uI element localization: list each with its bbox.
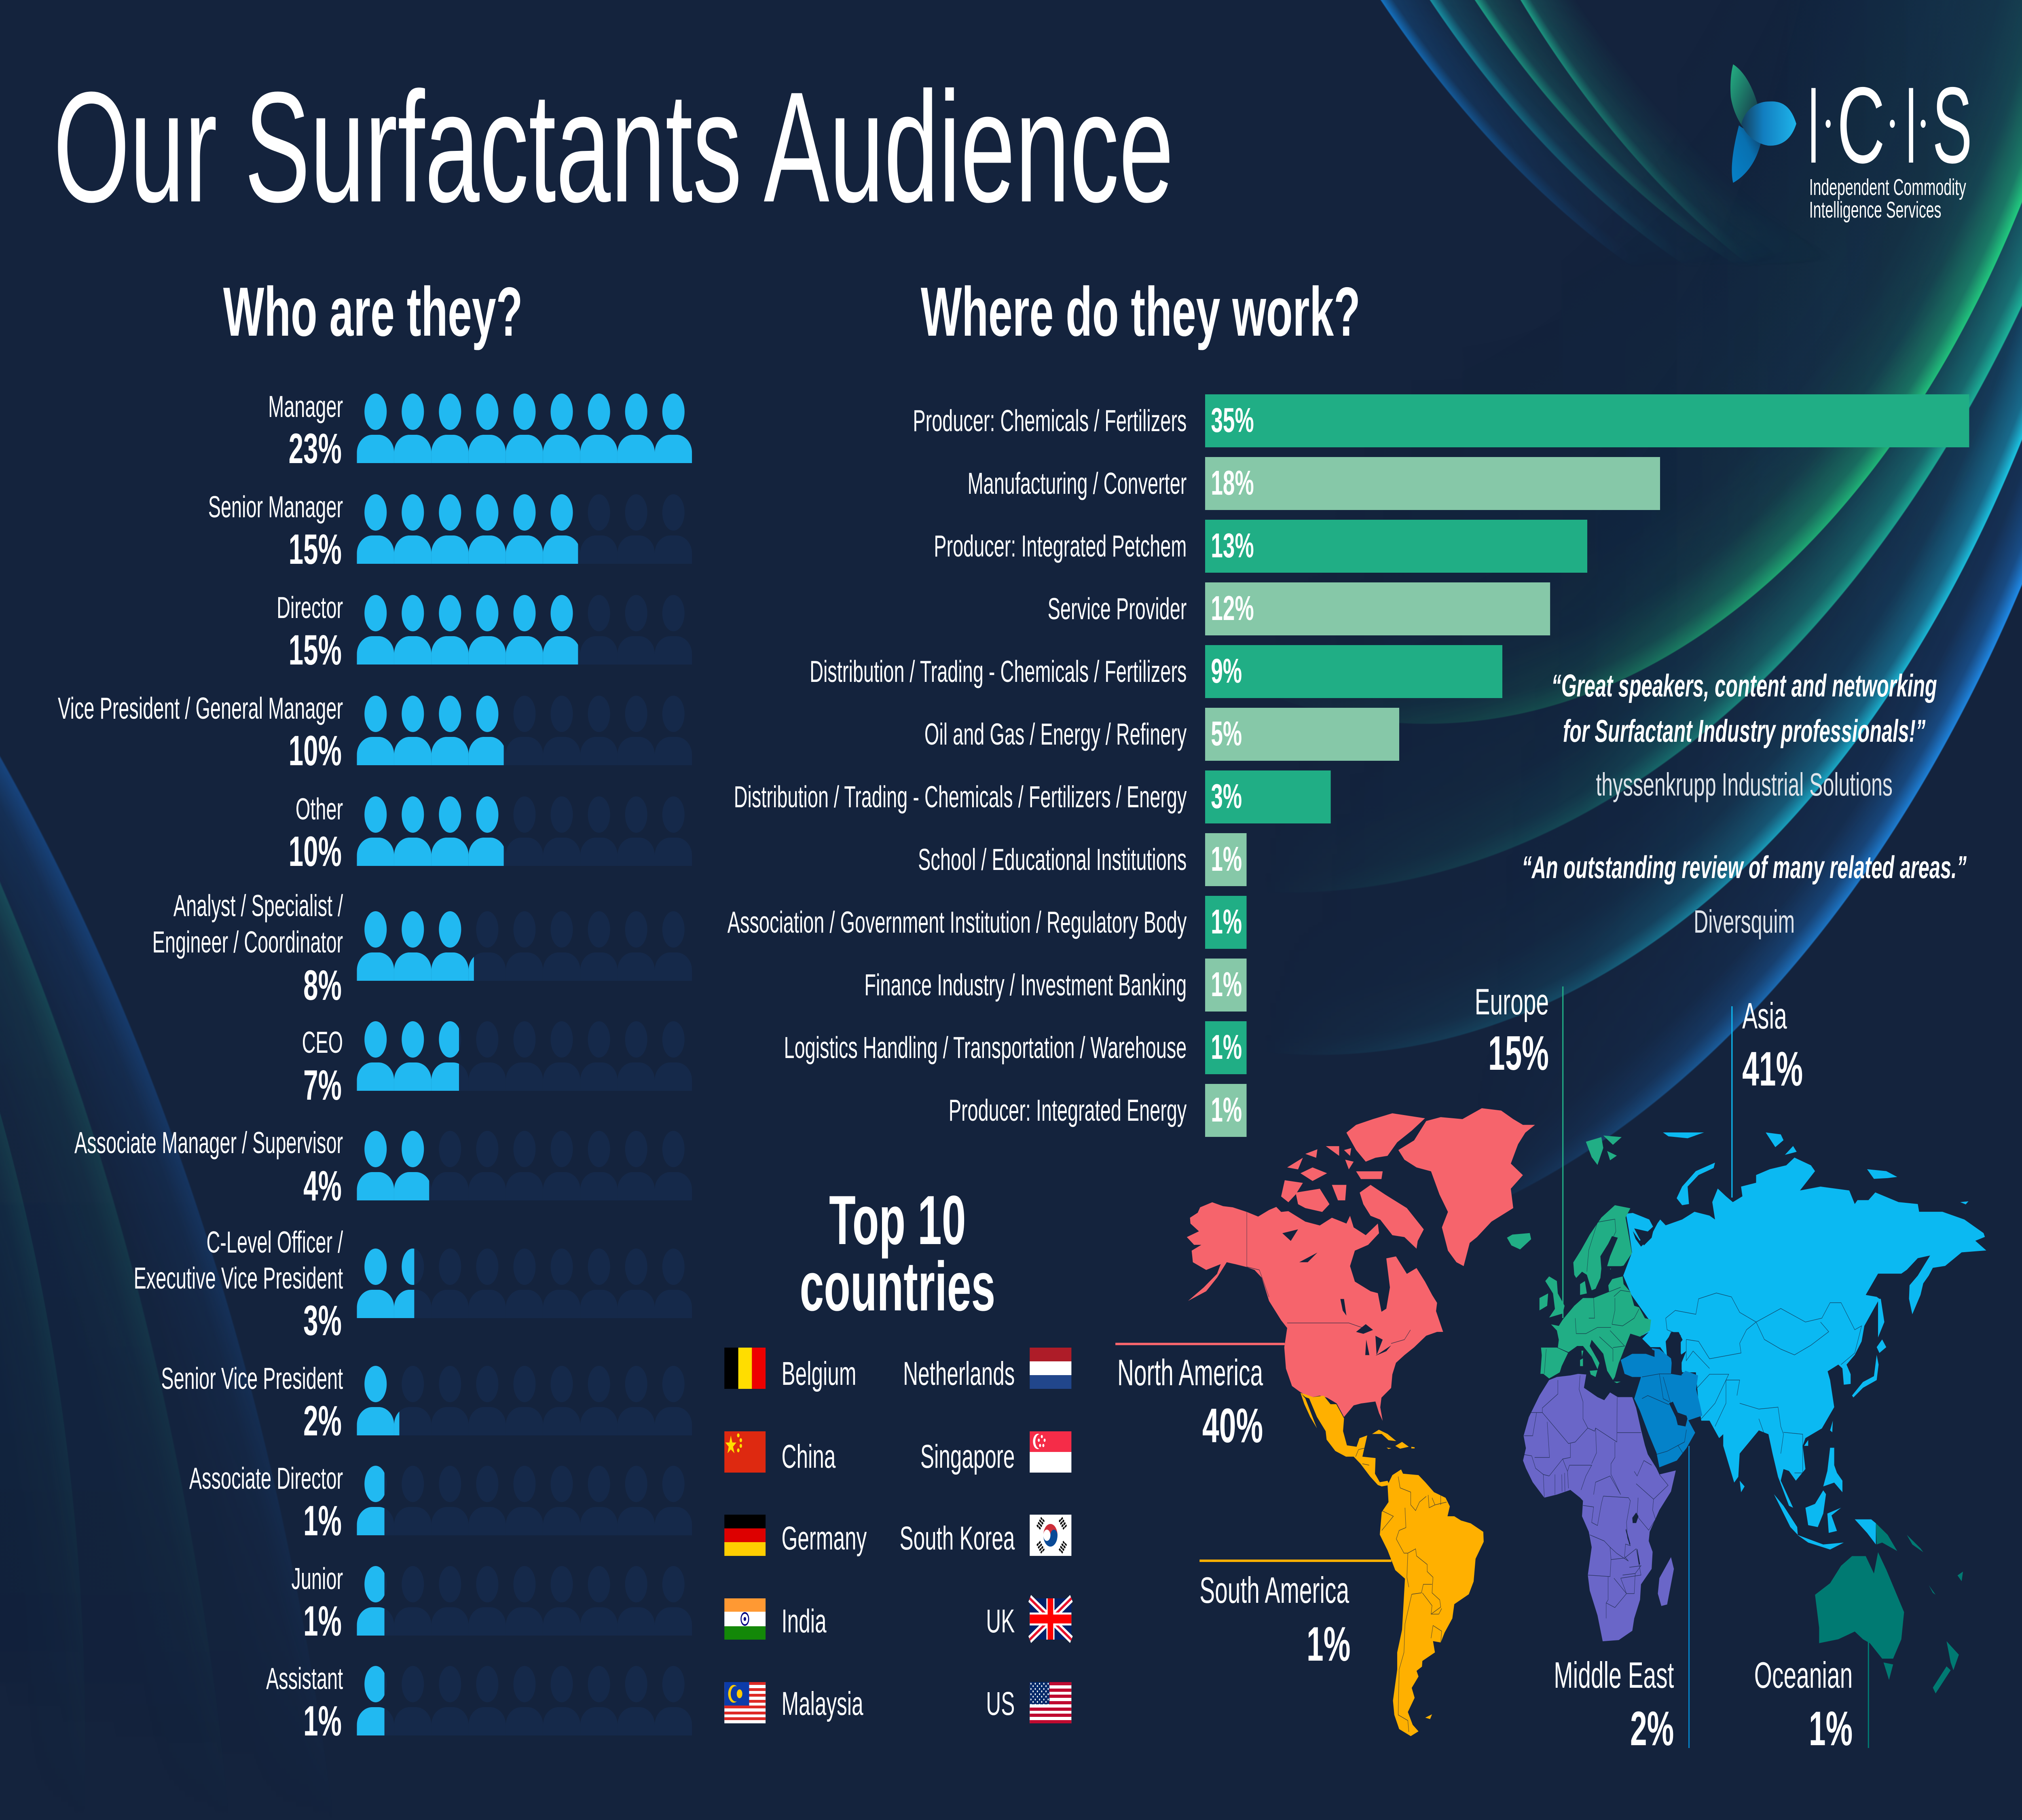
callout: Asia: Asia (1742, 995, 1787, 1037)
row: Senior Manager (208, 490, 692, 573)
bar chart: where do they work: 1% (1211, 903, 1242, 941)
bar chart: where do they work: 35% (1211, 401, 1254, 440)
bar chart: where do they work: Service Provider (1048, 592, 1187, 626)
map: North America (1187, 1108, 1535, 1421)
bar chart: where do they work: 18% (1211, 464, 1254, 502)
row: Analyst: 8% (303, 961, 342, 1009)
callout: South America (1199, 1560, 1392, 1671)
ICIS logo: Intelligence Services (1809, 197, 1941, 223)
row: Senior VP: 2% (303, 1397, 342, 1445)
row: Junior: 1% (303, 1597, 342, 1645)
row: Analyst (152, 889, 692, 1009)
quotes (1522, 668, 1967, 940)
quotes: “Great speakers, content and networking (1551, 668, 1937, 703)
ICIS logo (1730, 64, 1972, 223)
bar chart: where do they work: Distribution / Trading - Chemicals / Fertilizers / Energy (734, 780, 1187, 814)
bar chart: where do they work: Logistics Handling / Transportation / Warehouse (784, 1031, 1187, 1065)
callout: Oceanian (1754, 1634, 1869, 1756)
map: Middle East (1621, 1348, 1702, 1467)
callout: Europe (1475, 981, 1563, 1318)
top 10 countries heading (799, 1181, 995, 1325)
panel: top 10 countries list: UK (986, 1603, 1015, 1640)
panel: who are they pictogram rows (58, 390, 692, 1745)
row: Assistant: 1% (303, 1697, 342, 1745)
row: Associate Manager: 4% (303, 1162, 342, 1210)
bar chart: where do they work: 12% (1211, 589, 1254, 628)
background arcs bottom left (0, 756, 305, 1638)
callout: Asia (1731, 995, 1803, 1198)
row: Other (289, 792, 692, 875)
bar chart: where do they work: Finance Industry / Investment Banking (864, 968, 1187, 1002)
flag: Belgium (724, 1348, 766, 1389)
row: C-Level: 3% (303, 1297, 342, 1344)
row: Senior VP (161, 1362, 692, 1445)
row: Vice President: 10% (289, 727, 342, 775)
bar chart: where do they work: 1% (1211, 965, 1242, 1004)
row: Director: Director (277, 591, 343, 625)
bar chart: where do they work: 1% (1211, 1091, 1242, 1129)
callout: Middle East: 2% (1630, 1701, 1674, 1756)
ICIS logo: Independent Commodity (1809, 175, 1966, 200)
row: Senior Manager: 15% (289, 525, 342, 573)
ICIS logo: I (1905, 65, 1917, 186)
row: C-Level: Executive Vice President (134, 1261, 343, 1295)
callout: North America: 40% (1202, 1399, 1263, 1453)
ICIS logo: I (1807, 65, 1820, 186)
row: Associate Manager: Associate Manager / Supervisor (74, 1126, 343, 1160)
bar chart: where do they work: Distribution / Trading - Chemicals / Fertilizers (810, 655, 1187, 689)
row: Analyst: Engineer / Coordinator (152, 925, 343, 959)
quotes: for Surfactant Industry professionals!” (1563, 713, 1926, 749)
bar chart: where do they work: Producer: Integrated Petchem (934, 529, 1187, 563)
flag: Netherlands (1030, 1348, 1071, 1389)
quotes: thyssenkrupp Industrial Solutions (1596, 767, 1893, 803)
flag: US (1030, 1682, 1071, 1723)
bar chart: where do they work: School / Educational Institutions (918, 843, 1187, 877)
quotes: “An outstanding review of many related areas.” (1522, 849, 1967, 885)
panel: top 10 countries list: Singapore (920, 1438, 1015, 1475)
panel: top 10 countries list (724, 1348, 1071, 1723)
panel: top 10 countries list: US (986, 1685, 1015, 1722)
row: CEO: 7% (303, 1061, 342, 1109)
panel: top 10 countries list: Malaysia (781, 1685, 863, 1722)
map: Latin America (1300, 1393, 1484, 1736)
flag: Germany (724, 1515, 766, 1556)
bar chart: where do they work: Association / Government Institution / Regulatory Body (728, 906, 1187, 940)
row: C-Level: C-Level Officer / (206, 1225, 343, 1259)
row: Assistant (266, 1662, 692, 1745)
row: Associate Director: Associate Director (189, 1462, 343, 1496)
callout: Middle East: Middle East (1554, 1655, 1674, 1696)
bar chart: where do they work: Manufacturing / Converter (968, 467, 1187, 501)
callout: Oceanian: 1% (1809, 1701, 1853, 1756)
panel: top 10 countries list: Netherlands (903, 1355, 1015, 1392)
row: Associate Manager (74, 1126, 692, 1210)
bar chart: where do they work: Producer: Integrated Energy (949, 1094, 1187, 1128)
map: North America lakes (1282, 1230, 1391, 1356)
row: Analyst: Analyst / Specialist / (173, 889, 343, 923)
ICIS logo: C (1837, 65, 1885, 186)
flag: China (724, 1431, 766, 1473)
bar chart: where do they work: 5% (1211, 715, 1242, 753)
ICIS logo: S (1932, 65, 1972, 186)
row: CEO: CEO (302, 1026, 343, 1060)
callout: South America: 1% (1307, 1617, 1350, 1671)
map: Oceania (1815, 1523, 1963, 1693)
callout: Europe: Europe (1475, 981, 1549, 1022)
quotes: Diversquim (1694, 904, 1795, 940)
bar chart: where do they work: 9% (1211, 652, 1242, 690)
callout: North America (1115, 1343, 1285, 1453)
flag: UK (1030, 1598, 1071, 1640)
row: Senior Manager: Senior Manager (208, 490, 343, 524)
top 10 countries heading: Top 10 (829, 1181, 966, 1259)
bar chart: where do they work: 3% (1211, 777, 1242, 816)
flag: South Korea (1030, 1515, 1071, 1556)
map: Europe (1507, 1136, 1651, 1383)
row: Vice President: Vice President / General Manager (58, 692, 343, 726)
panel: top 10 countries list: China (781, 1438, 836, 1475)
callout: South America: South America (1199, 1570, 1349, 1611)
map: Asia (1623, 1132, 1986, 1549)
map: Africa (1523, 1374, 1676, 1641)
top 10 countries heading: countries (799, 1248, 995, 1325)
row: Vice President (58, 692, 692, 775)
row: Junior (291, 1562, 692, 1645)
panel: top 10 countries list: South Korea (900, 1520, 1015, 1557)
bar chart: where do they work: 1% (1211, 1028, 1242, 1067)
map: country borders (1247, 1212, 1861, 1732)
bar chart: where do they work: Producer: Chemicals / Fertilizers (913, 404, 1187, 438)
panel: top 10 countries list: Belgium (781, 1355, 857, 1392)
row: Associate Director: 1% (303, 1497, 342, 1545)
flag: Malaysia (724, 1682, 766, 1723)
callout: Asia: 41% (1742, 1042, 1803, 1096)
bar chart: where do they work: 1% (1211, 840, 1242, 878)
map: water overlays (1595, 1225, 1688, 1565)
panel: top 10 countries list: Germany (781, 1520, 867, 1557)
row: Manager: Manager (268, 390, 343, 424)
callout: North America: North America (1117, 1352, 1263, 1393)
row: Associate Director (189, 1462, 692, 1545)
callout: Europe: 15% (1488, 1026, 1549, 1080)
row: Other: Other (296, 792, 343, 826)
row: Assistant: Assistant (266, 1662, 343, 1696)
row: Junior: Junior (291, 1562, 343, 1596)
bar chart: where do they work (728, 394, 1969, 1137)
row: CEO (302, 1021, 692, 1109)
heading: where do they work: Where do they work? (921, 273, 1360, 351)
callout: Middle East (1554, 1446, 1690, 1756)
heading: who are they: Who are they? (223, 273, 522, 351)
bar chart: where do they work: 13% (1211, 527, 1254, 565)
row: Manager (268, 390, 692, 472)
row: C-Level (134, 1225, 692, 1344)
row: Director: 15% (289, 626, 342, 674)
background arcs top right (1325, 0, 2022, 1195)
callout: Oceanian: Oceanian (1754, 1655, 1853, 1696)
flag: India (724, 1598, 766, 1640)
row: Senior VP: Senior Vice President (161, 1362, 343, 1396)
row: Manager: 23% (289, 425, 342, 472)
title: Our Surfactants Audience (53, 59, 1174, 235)
flag: Singapore (1030, 1431, 1071, 1473)
row: Director (277, 591, 692, 674)
world map (1187, 1108, 1986, 1736)
bar chart: where do they work: Oil and Gas / Energy / Refinery (924, 717, 1187, 751)
panel: top 10 countries list: India (781, 1603, 827, 1640)
row: Other: 10% (289, 827, 342, 875)
